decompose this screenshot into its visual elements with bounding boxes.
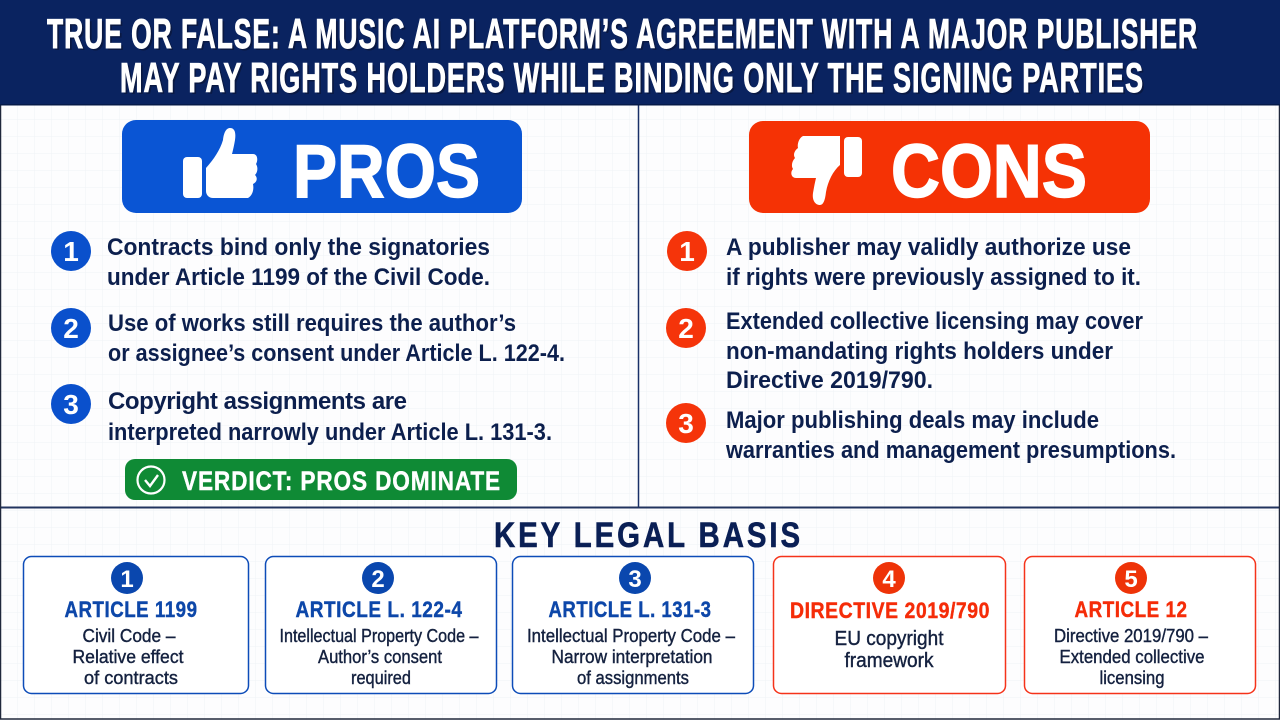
card 3: of assignments (577, 668, 689, 688)
cons item 3: Major publishing deals may include (726, 407, 1099, 434)
cons item 3: warranties and management presumptions. (725, 437, 1176, 464)
card 5: licensing (1100, 668, 1164, 688)
panel: pros (51, 120, 565, 500)
heading: KEY LEGAL BASIS (494, 516, 803, 555)
pros badge (122, 120, 522, 213)
cons item 2: Extended collective licensing may cover (726, 308, 1143, 335)
card 2: 2 (371, 566, 385, 593)
cons item 3: 3 (678, 408, 694, 439)
card 1: of contracts (84, 668, 178, 688)
card 5: Directive 2019/790 – (1054, 626, 1208, 646)
cons item 2: 2 (678, 313, 694, 344)
card 3: 3 (628, 566, 642, 593)
cons item 3 (666, 403, 1176, 464)
card 5: ARTICLE 12 (1074, 597, 1188, 622)
card 5: Extended collective (1060, 647, 1204, 667)
card 4: framework (844, 650, 934, 672)
card 1: Civil Code – (82, 626, 176, 646)
cons badge (749, 121, 1150, 213)
pros item 2: or assignee’s consent under Article L. 122-4. (108, 340, 565, 367)
pros item 1: Contracts bind only the signatories (107, 234, 490, 261)
card 4: EU copyright (834, 628, 944, 650)
card 1: ARTICLE 1199 (64, 597, 198, 622)
card 2: Intellectual Property Code – (280, 626, 478, 646)
panel: cons (666, 121, 1176, 464)
panel: key legal basis (24, 516, 1256, 694)
card 4: DIRECTIVE 2019/790 (790, 598, 990, 623)
card 3: Intellectual Property Code – (527, 626, 735, 646)
pros item 3 (51, 384, 552, 446)
cons item 2 (666, 308, 1143, 394)
pros item 2: Use of works still requires the author’s (108, 310, 516, 337)
verdict badge (125, 459, 517, 500)
pros item 2: 2 (63, 313, 79, 344)
cons badge: CONS (891, 129, 1087, 213)
card 5 (1024, 556, 1256, 694)
card 3 (512, 556, 754, 694)
card 2: ARTICLE L. 122-4 (296, 597, 463, 622)
pros item 3: interpreted narrowly under Article L. 131-3. (108, 419, 552, 446)
pros item 3: Copyright assignments are (108, 388, 407, 415)
pros item 1: under Article 1199 of the Civil Code. (107, 264, 490, 291)
pros badge: PROS (293, 129, 480, 213)
card 3: ARTICLE L. 131-3 (548, 597, 712, 622)
card 4: 4 (882, 566, 896, 593)
card 1 (24, 556, 248, 694)
card 1: 1 (120, 566, 134, 593)
icon: check circle (138, 466, 164, 494)
pros item 1 (51, 231, 490, 291)
card 2: Author’s consent (318, 647, 442, 667)
pros item 3: 3 (63, 389, 79, 420)
pros item 2 (51, 308, 565, 367)
card 4 (774, 556, 1006, 694)
cons item 2: non-mandating rights holders under (726, 338, 1113, 365)
header: title (0, 0, 1280, 106)
cons item 1: A publisher may validly authorize use (726, 234, 1131, 261)
card 5: 5 (1124, 566, 1138, 593)
cons item 1: 1 (679, 236, 695, 267)
card 2 (266, 556, 496, 694)
icon: thumbs down (791, 136, 862, 205)
pros item 1: 1 (63, 236, 79, 267)
icon: thumbs up (183, 128, 257, 198)
verdict badge: VERDICT: PROS DOMINATE (182, 466, 501, 496)
card 3: Narrow interpretation (552, 647, 712, 667)
card 1: Relative effect (72, 647, 184, 667)
cons item 2: Directive 2019/790. (726, 367, 933, 394)
card 2: required (351, 668, 411, 688)
cons item 1 (667, 231, 1141, 291)
cons item 1: if rights were previously assigned to it. (726, 264, 1141, 291)
